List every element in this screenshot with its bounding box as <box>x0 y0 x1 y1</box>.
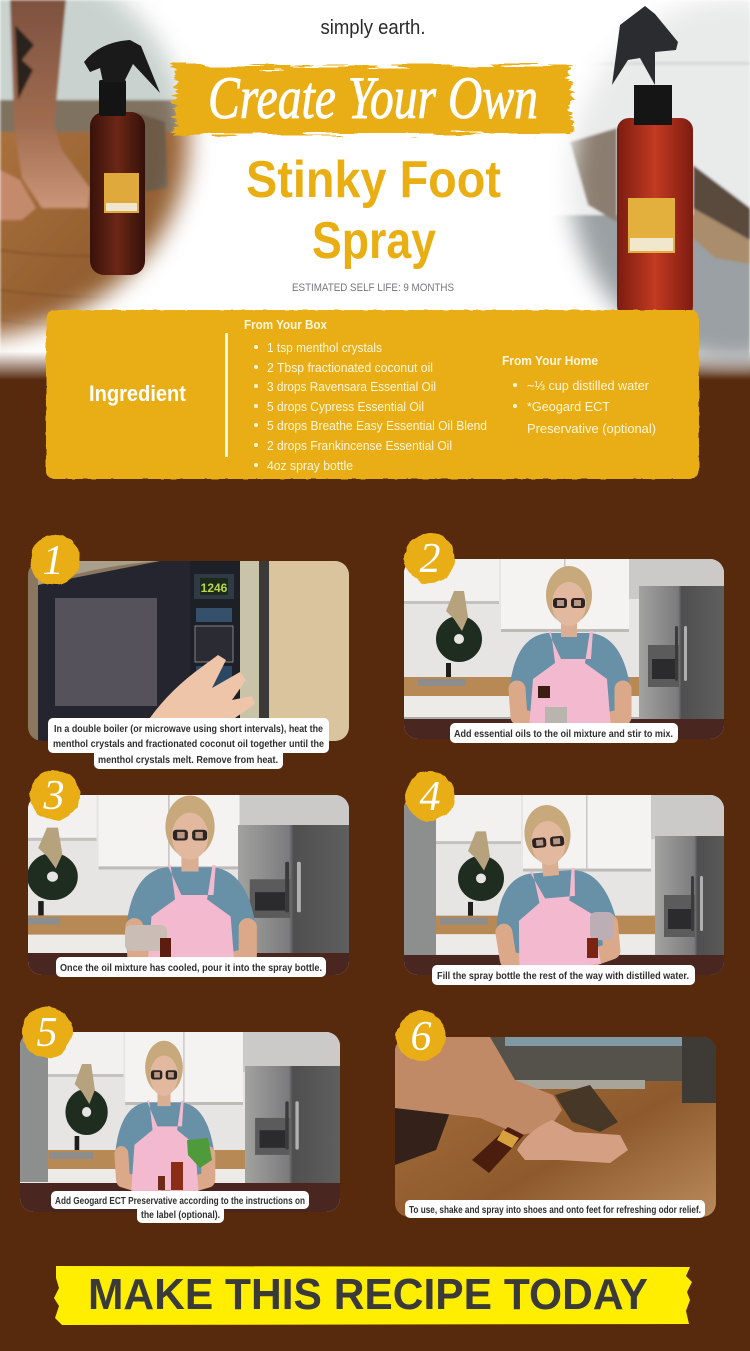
caption 1: In a double boiler (or microwave using short intervals), heat the <box>54 723 323 735</box>
caption 2 <box>450 723 678 743</box>
step 1 <box>28 535 349 769</box>
call to action banner: MAKE THIS RECIPE TODAY <box>88 1270 648 1319</box>
photo: spraying foot <box>395 1037 716 1217</box>
list: from your box: 1 tsp menthol crystals <box>267 341 382 355</box>
icon: left spray bottle <box>84 40 160 275</box>
badge 1 <box>30 535 80 585</box>
list: from your box: From Your Box <box>244 318 327 332</box>
header white area <box>0 0 750 380</box>
photo: adding preservative <box>20 1032 340 1212</box>
list: from your box: 5 drops Cypress Essential Oil <box>267 400 424 414</box>
list: from your home: From Your Home <box>502 354 598 368</box>
list: from your home: Preservative (optional) <box>527 422 656 436</box>
list: from your box: 5 drops Breathe Easy Essential Oil Blend <box>267 419 487 433</box>
list: from your box: 3 drops Ravensara Essential Oil <box>267 380 436 394</box>
caption 5 <box>51 1191 309 1223</box>
badge 2 <box>405 533 455 583</box>
badge 5: 5 <box>36 1010 58 1056</box>
caption 5: the label (optional). <box>141 1209 220 1221</box>
caption 1: menthol crystals melt. Remove from heat. <box>98 754 278 766</box>
badge 4 <box>405 771 455 821</box>
caption 5: Add Geogard ECT Preservative according to the instructions on <box>55 1195 305 1207</box>
step 2 <box>404 533 724 743</box>
badge 6: 6 <box>410 1014 432 1060</box>
badge 3: 3 <box>42 773 64 819</box>
list: from your box: 2 Tbsp fractionated coconut oil <box>267 361 433 375</box>
caption 3 <box>56 957 326 977</box>
list: from your home: ~⅓ cup distilled water <box>527 379 649 393</box>
step 5 <box>20 1006 340 1223</box>
caption 4 <box>432 965 695 985</box>
caption 1: menthol crystals and fractionated coconut oil together until the <box>53 738 324 750</box>
badge 6 <box>396 1011 446 1061</box>
list: from your home: *Geogard ECT <box>527 400 610 414</box>
shelf life note: ESTIMATED SELF LIFE: 9 MONTHS <box>292 282 454 294</box>
step 6 <box>395 1011 716 1218</box>
caption 4: Fill the spray bottle the rest of the way with distilled water. <box>437 970 689 982</box>
photo: adding essential oils <box>404 559 724 739</box>
title brush: Create Your Own: Create Your Own <box>208 65 538 131</box>
icon: right spray bottle <box>612 6 693 318</box>
step 3 <box>28 770 349 977</box>
list: from your box <box>244 318 487 473</box>
badge 5 <box>22 1007 72 1057</box>
list: from your home <box>502 354 656 436</box>
badge 3 <box>30 770 80 820</box>
title: Stinky Foot Spray: Stinky Foot <box>246 151 501 209</box>
photo: microwave: 1246 <box>201 581 228 595</box>
photo: filling with distilled water <box>404 795 724 975</box>
badge 4: 4 <box>420 774 440 820</box>
step 4 <box>404 771 724 985</box>
photo: pouring oil mixture <box>28 795 349 975</box>
caption 3: Once the oil mixture has cooled, pour it into the spray bottle. <box>60 962 322 974</box>
panel: ingredients <box>46 310 699 479</box>
photo: left foot and spray bottle <box>0 0 207 354</box>
list: from your box: 2 drops Frankincense Essential Oil <box>267 439 452 453</box>
caption 1 <box>48 718 329 769</box>
logo: simply earth. <box>320 17 426 39</box>
caption 2: Add essential oils to the oil mixture and stir to mix. <box>454 728 673 740</box>
badge 2: 2 <box>420 536 440 582</box>
title: Stinky Foot Spray <box>246 151 501 270</box>
list: from your box: 4oz spray bottle <box>267 459 353 473</box>
title: Stinky Foot Spray: Spray <box>312 212 436 270</box>
photo: right spray bottle and shoes <box>558 0 750 374</box>
photo: microwave <box>28 561 349 741</box>
badge 1: 1 <box>42 538 64 584</box>
heading: ingredient: Ingredient <box>89 381 187 406</box>
caption 6 <box>405 1200 705 1218</box>
